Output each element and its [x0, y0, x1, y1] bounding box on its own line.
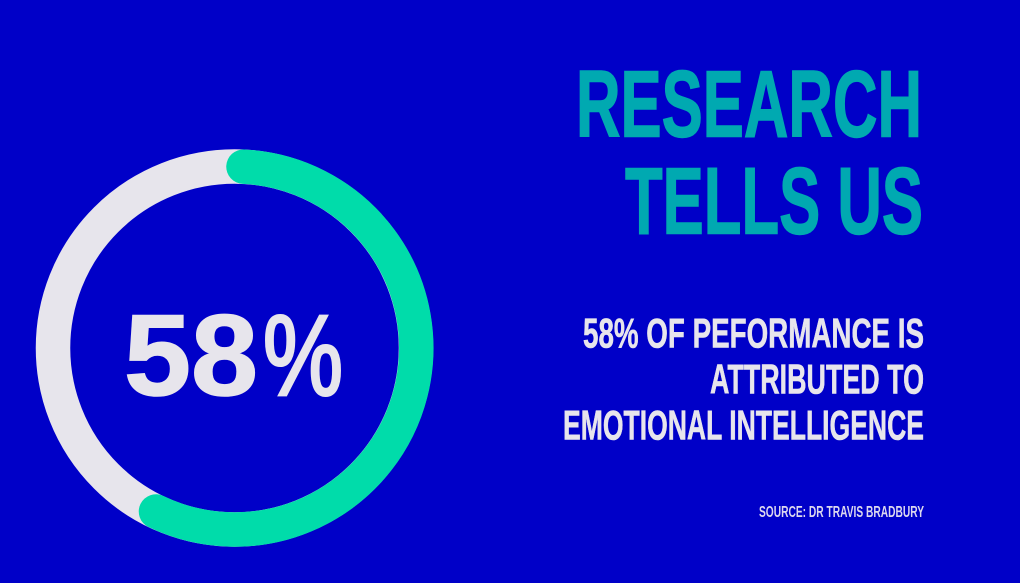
donut track — [53, 166, 416, 530]
statement text — [563, 310, 924, 448]
donut value percent sign: % — [263, 293, 343, 420]
donut value — [124, 292, 343, 420]
donut progress arc — [156, 167, 416, 529]
donut value digits: 58 — [124, 292, 258, 420]
donut chart: 58 percent — [53, 166, 416, 530]
source note: SOURCE: DR TRAVIS BRADBURY — [759, 504, 924, 521]
title — [576, 52, 923, 254]
